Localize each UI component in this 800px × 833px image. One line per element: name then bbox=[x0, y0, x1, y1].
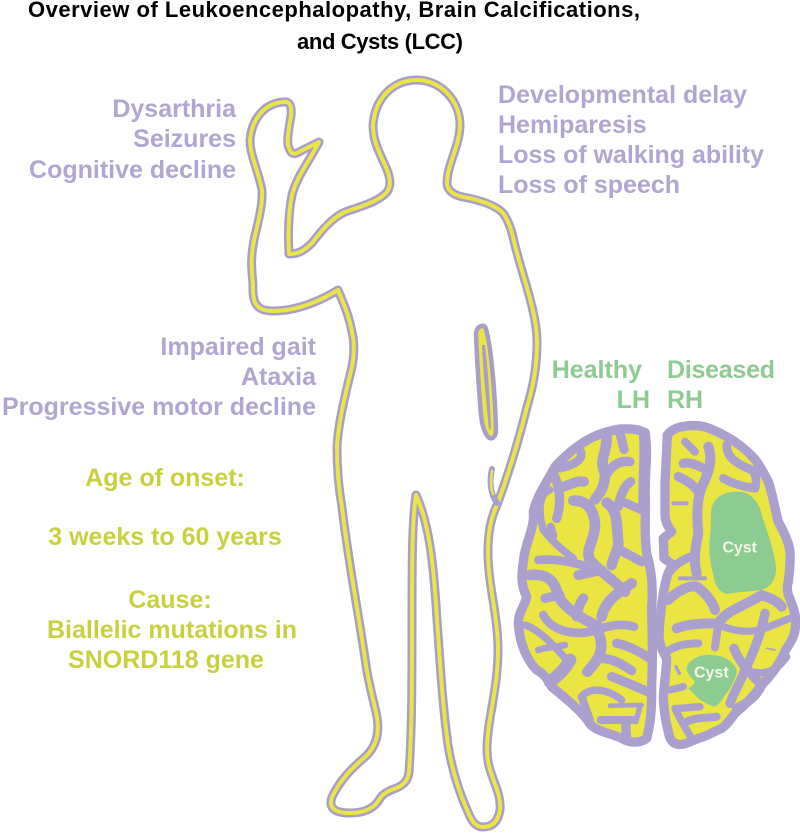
title: and Cysts (LCC) bbox=[297, 29, 463, 54]
symptoms: head bbox=[29, 95, 237, 184]
label: diseased right hemisphere: Diseased bbox=[667, 356, 775, 384]
symptoms: development: Developmental delay bbox=[498, 81, 747, 109]
inner arm slit bbox=[476, 326, 496, 438]
right hemisphere bbox=[659, 426, 796, 744]
symptoms: motor: Ataxia bbox=[241, 363, 317, 391]
cyst: small bbox=[687, 655, 737, 707]
label: healthy left hemisphere bbox=[552, 356, 650, 414]
symptoms: motor: Progressive motor decline bbox=[2, 393, 316, 421]
cause bbox=[47, 586, 297, 674]
title bbox=[28, 0, 640, 54]
symptoms: motor: Impaired gait bbox=[160, 333, 317, 361]
symptoms: motor bbox=[2, 333, 317, 421]
cyst: large bbox=[709, 492, 776, 594]
label: healthy left hemisphere: Healthy bbox=[552, 356, 642, 384]
symptoms: head: Dysarthria bbox=[112, 95, 237, 123]
cause: Cause: bbox=[128, 586, 212, 614]
label: healthy left hemisphere: LH bbox=[617, 386, 650, 414]
brain bbox=[518, 426, 796, 744]
age of onset: Age of onset: bbox=[85, 464, 245, 492]
cause: SNORD118 gene bbox=[68, 646, 264, 674]
human body outline bbox=[250, 80, 537, 827]
age of onset: 3 weeks to 60 years bbox=[48, 523, 282, 551]
symptoms: head: Seizures bbox=[133, 125, 236, 153]
symptoms: development: Loss of speech bbox=[498, 171, 680, 199]
cyst labels bbox=[694, 539, 758, 681]
symptoms: development: Hemiparesis bbox=[498, 111, 647, 139]
label: diseased right hemisphere: RH bbox=[667, 386, 703, 414]
cause: Biallelic mutations in bbox=[47, 616, 297, 644]
cyst labels: Cyst bbox=[694, 664, 729, 681]
cyst labels: Cyst bbox=[722, 539, 758, 556]
inner hand hook bbox=[491, 469, 497, 503]
label: diseased right hemisphere bbox=[667, 356, 775, 414]
symptoms: development: Loss of walking ability bbox=[498, 141, 764, 169]
symptoms: head: Cognitive decline bbox=[29, 156, 236, 184]
age of onset bbox=[48, 464, 282, 551]
left hemisphere bbox=[518, 429, 652, 742]
symptoms: development bbox=[498, 81, 764, 199]
